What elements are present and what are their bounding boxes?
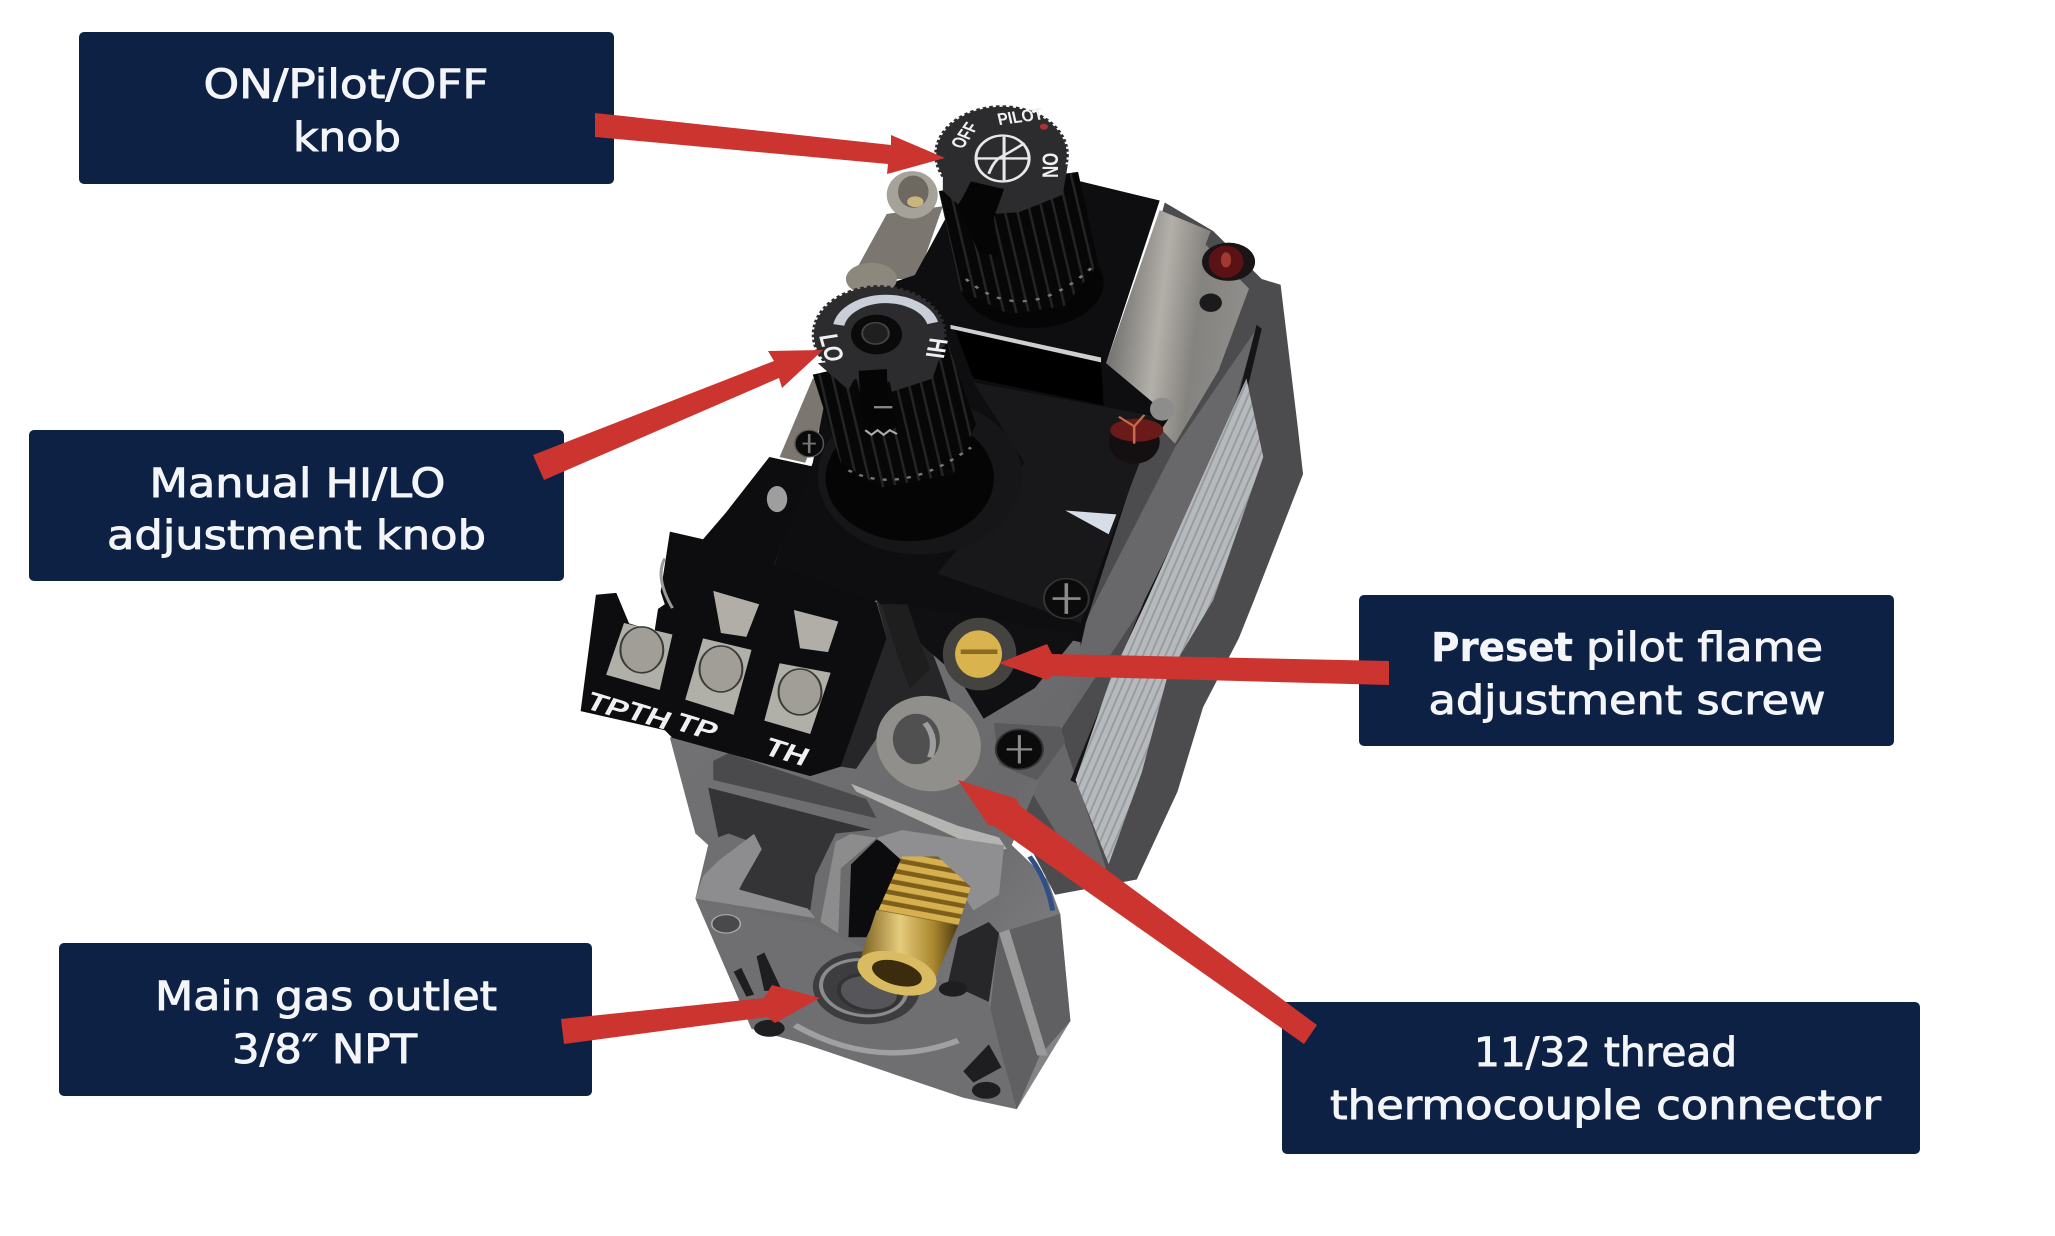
thermocouple block xyxy=(877,830,1004,910)
lower valve body xyxy=(670,600,1081,1109)
brass fitting xyxy=(848,856,971,1005)
body top bar xyxy=(713,753,877,818)
callout: 11/32 thread thermocouple connector: thermocouple connector xyxy=(1330,1083,1882,1129)
plate screw left xyxy=(795,430,823,457)
callout: ON/Pilot/OFF knob xyxy=(79,32,614,184)
black stripe xyxy=(1070,325,1262,784)
coil spring xyxy=(882,604,930,688)
brass pilot screw xyxy=(943,618,1016,690)
callout: ON/Pilot/OFF knob: knob xyxy=(293,115,401,161)
lower port fitting xyxy=(846,263,897,295)
silver bracket xyxy=(1106,210,1249,444)
arrow: to Manual HI/LO knob xyxy=(533,350,823,480)
knob: Manual HI/LO: HI xyxy=(920,336,953,360)
terminal labels xyxy=(581,687,814,772)
bright ridge xyxy=(851,784,1007,853)
arrow: to preset pilot screw xyxy=(999,644,1389,685)
arrow: to ON/Pilot/OFF knob xyxy=(595,113,945,174)
pilot block xyxy=(877,600,1078,719)
knob: ON/Pilot/OFF xyxy=(936,105,1104,328)
body recess xyxy=(708,788,871,910)
terminal labels: TH xyxy=(621,697,677,735)
terminal plates xyxy=(606,623,831,734)
terminal screws xyxy=(620,627,821,715)
callout: Preset pilot flame adjustment screw: Preset xyxy=(1431,625,1573,671)
spade lugs xyxy=(713,591,838,652)
plate screw right xyxy=(1044,579,1089,618)
terminal labels: TP xyxy=(669,708,723,746)
terminal labels: TP xyxy=(581,687,635,725)
terminal labels: TH xyxy=(759,733,814,772)
left metal strip xyxy=(851,206,943,279)
knob: Manual HI/LO xyxy=(813,287,976,488)
white triangle mark xyxy=(1065,511,1116,534)
flange slots and holes xyxy=(712,915,1002,1099)
flange front xyxy=(695,899,1017,1109)
knob: Manual HI/LO: LO xyxy=(813,332,850,364)
callout: Manual HI/LO adjustment knob: adjustment knob xyxy=(107,513,486,559)
photo: gas valve xyxy=(581,105,1303,1109)
valve housing xyxy=(1009,202,1303,895)
dark block beside terminals xyxy=(841,600,953,769)
callout: Manual HI/LO adjustment knob xyxy=(29,430,564,581)
arrow: to thermocouple connector xyxy=(958,780,1317,1044)
top plate xyxy=(774,181,1170,646)
callout: Main gas outlet 3/8" NPT: 3/8″ NPT xyxy=(232,1027,418,1073)
knob skirt xyxy=(818,398,1022,555)
callout: Preset pilot flame adjustment screw xyxy=(1359,595,1894,746)
gas outlet hole xyxy=(795,945,958,1053)
arrow: to main gas outlet xyxy=(561,985,820,1044)
knob: ON/Pilot/OFF: ON xyxy=(1037,153,1062,178)
wire xyxy=(1030,856,1053,910)
rating label xyxy=(1076,379,1263,864)
thermocouple connector port xyxy=(868,691,989,796)
callout: Main gas outlet 3/8" NPT xyxy=(59,943,592,1096)
terminal block xyxy=(581,457,887,776)
callout: 11/32 thread thermocouple connector xyxy=(1282,1002,1920,1154)
callout: Main gas outlet 3/8" NPT: Main gas outlet xyxy=(155,974,497,1020)
side band xyxy=(1024,329,1257,868)
red adjuster screw xyxy=(1199,243,1255,312)
knob: ON/Pilot/OFF: OFF xyxy=(946,120,983,151)
right flange xyxy=(989,914,1070,1109)
callout: ON/Pilot/OFF knob: ON/Pilot/OFF xyxy=(204,62,488,108)
red ground screw xyxy=(1109,398,1174,464)
knob: ON/Pilot/OFF: PILOT xyxy=(996,105,1045,129)
callout: 11/32 thread thermocouple connector: 11/32 thread xyxy=(1474,1030,1737,1076)
callout: Manual HI/LO adjustment knob: Manual HI/LO xyxy=(150,461,446,507)
upper port fitting xyxy=(887,171,938,219)
screw near port xyxy=(996,729,1043,769)
callout: Preset pilot flame adjustment screw: pilot flame xyxy=(1586,625,1823,671)
callout: Preset pilot flame adjustment screw: adjustment screw xyxy=(1428,678,1826,724)
